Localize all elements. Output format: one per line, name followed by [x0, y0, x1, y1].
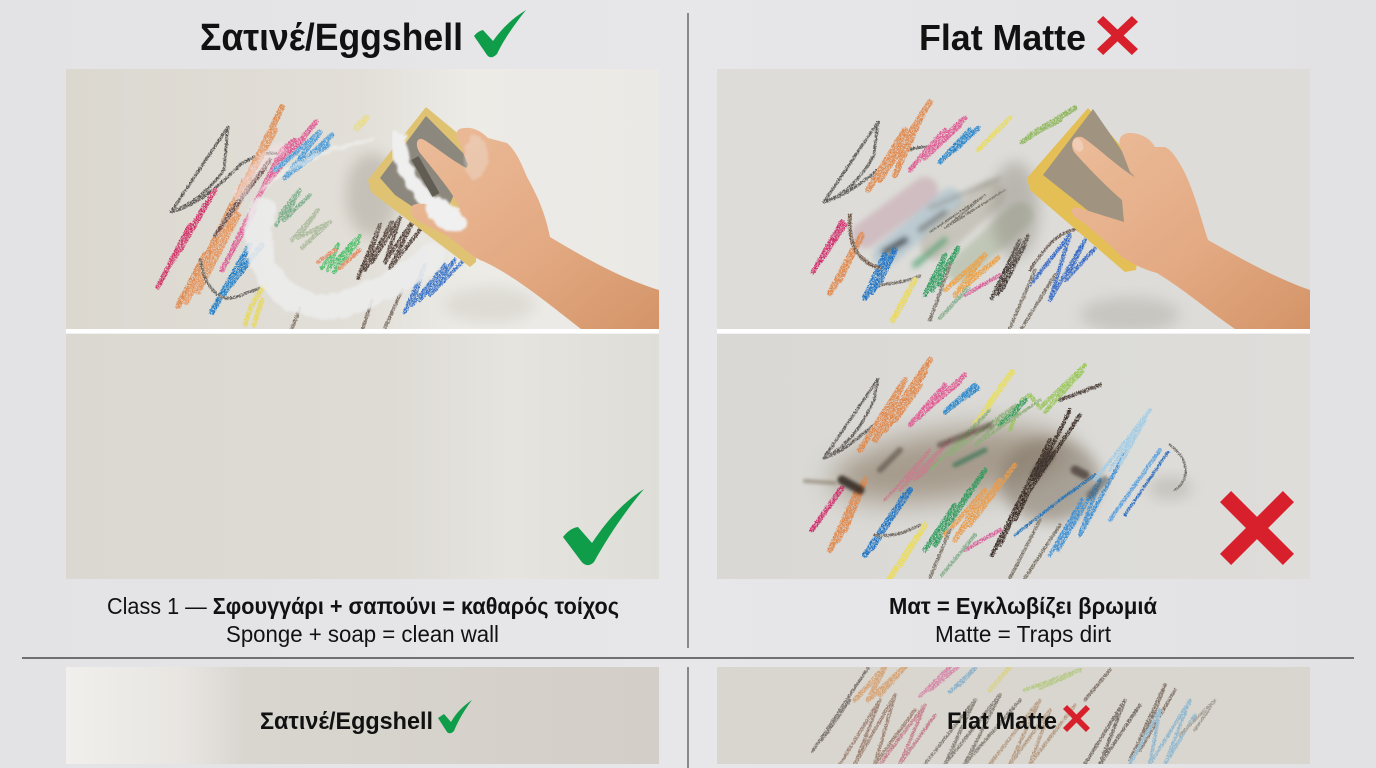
heading: satin eggshell: Σατινέ/Eggshell [200, 17, 463, 59]
crayon scribbles: matte bottom [812, 360, 1186, 578]
caption: satin: Sponge + soap = clean wall [226, 621, 499, 647]
smear: matte bottom [826, 415, 1192, 522]
hand: matte [1071, 133, 1310, 329]
label: flat matte: Flat Matte [947, 708, 1057, 735]
smear: matte top [865, 178, 1020, 270]
column divider [687, 13, 689, 768]
heading: flat matte: Flat Matte [919, 17, 1086, 58]
crayon scribbles: satin [158, 107, 462, 328]
caption: satin: Class 1 — Σφουγγάρι + σαπούνι = καθαρός τοίχος [107, 593, 619, 619]
panel: satin clean wall [66, 334, 659, 579]
foam on hand [424, 134, 490, 233]
panel: bottom strip matte [717, 667, 1310, 764]
icon: large red x [1220, 491, 1294, 565]
caption: matte: Matte = Traps dirt [935, 621, 1112, 647]
caption: matte [889, 593, 1157, 647]
caption: satin [107, 593, 619, 647]
smear: dark patches [805, 425, 1105, 495]
crayon strip scribbles [812, 667, 1215, 764]
label: satin eggshell: Σατινέ/Eggshell [260, 708, 433, 735]
sponge: matte [1027, 108, 1137, 272]
shadow: hand satin [346, 153, 398, 237]
panel: satin during cleaning [66, 69, 659, 329]
panel: matte during cleaning [717, 69, 1310, 333]
white separator left [66, 329, 659, 334]
panel: bottom strip satin [66, 667, 659, 764]
white separator right [717, 329, 1310, 334]
foam ring [240, 140, 432, 306]
panel: matte traps dirt [717, 334, 1310, 579]
sponge: satin [368, 107, 476, 267]
icon: small red x [1063, 705, 1090, 732]
caption: matte: Ματ = Εγκλωβίζει βρωμιά [889, 593, 1157, 619]
icon: green check heading [474, 10, 526, 57]
icon: small green check [438, 700, 472, 733]
icon: red x heading [1097, 16, 1138, 55]
section divider [22, 657, 1354, 659]
hand: satin [411, 128, 659, 329]
shadow: hand matte [991, 162, 1039, 258]
icon: large green check [563, 489, 644, 565]
crayon scribbles: matte top [813, 102, 1098, 328]
